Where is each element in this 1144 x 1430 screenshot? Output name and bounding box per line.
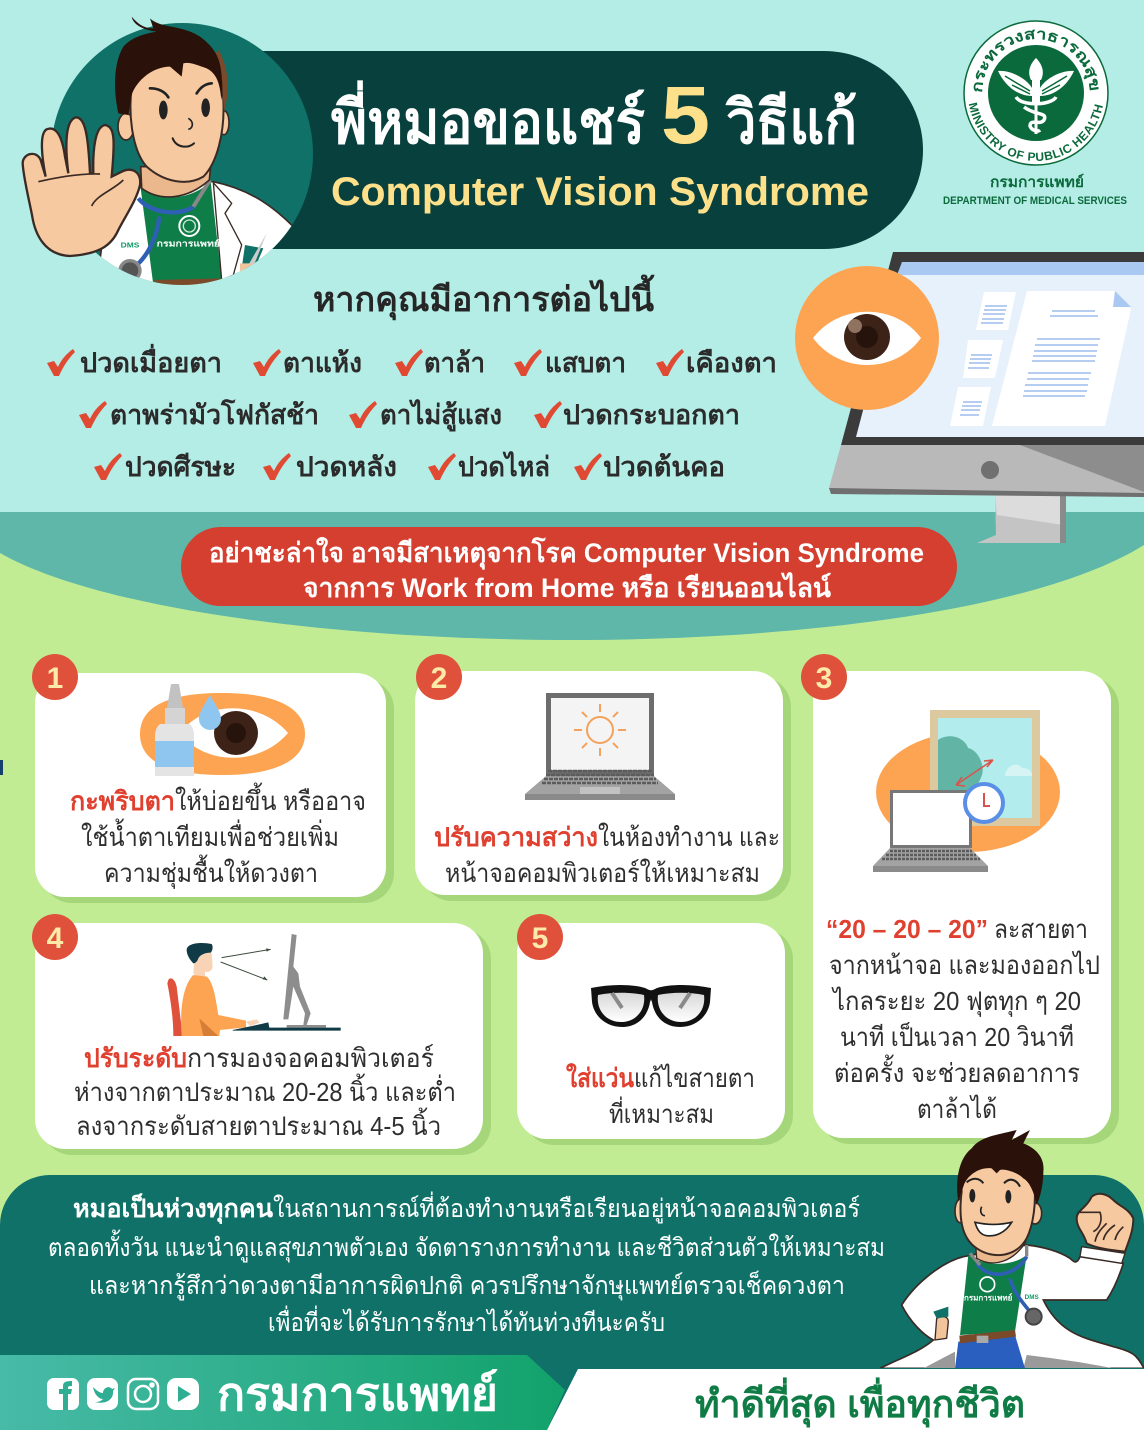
character: doctor flexing: กรมการแพทย์ [964, 1293, 1013, 1303]
logo ring text bottom: MINISTRY OF PUBLIC HEALTH [968, 102, 1103, 161]
warning pill: อย่าชะล่าใจ อาจมีสาเหตุจากโรค Computer Vision Syndrome [209, 536, 924, 570]
illustration: monitor [829, 252, 1144, 543]
symptoms checklist: ปวดไหล่ [458, 451, 550, 482]
icon: instagram [128, 1379, 158, 1409]
symptoms checklist: เคืองตา [686, 348, 777, 378]
card 5: glasses: ที่เหมาะสม [609, 1096, 714, 1129]
symptoms checklist: ตาล้า [424, 348, 485, 378]
teal curved band [0, 512, 1144, 640]
card 3: 20-20-20: ไกลระยะ 20 ฟุตทุก ๆ 20 [831, 986, 1081, 1017]
logo ring text top: กระทรวงสาธารณสุข [974, 30, 1099, 92]
footer slogan panel: ทำดีที่สุด เพื่อทุกชีวิต [695, 1377, 1025, 1428]
footer slogan panel [547, 1369, 1144, 1430]
badge 2: 2 [431, 662, 447, 695]
card 3: 20-20-20: นาที เป็นเวลา 20 วินาที [840, 1021, 1074, 1052]
symptoms checklist: ตาไม่สู้แสง [380, 399, 502, 432]
card 4: viewing distance: ลงจากระดับสายตาประมาณ 4-5 นิ้ว [76, 1107, 441, 1141]
message text: หมอเป็นห่วงทุกคน [73, 1193, 273, 1225]
badge 4: 4 [47, 922, 64, 955]
badge 3 [801, 654, 847, 700]
badge 1: 1 [47, 662, 63, 695]
card 5: glasses: แก้ไขสายตา [634, 1063, 755, 1093]
character: doctor flexing [880, 1130, 1144, 1368]
card 2: brightness: ในห้องทำงาน และ [598, 822, 780, 852]
card 1: blink: ใช้น้ำตาเทียมเพื่อช่วยเพิ่ม [81, 818, 339, 852]
badge 5: 5 [532, 922, 548, 955]
symptoms checklist: ปวดเมื่อยตา [80, 343, 222, 378]
header banner [260, 51, 923, 249]
icon: eye in orange circle [795, 266, 939, 410]
card 2: brightness: หน้าจอคอมพิวเตอร์ให้เหมาะสม [445, 858, 760, 888]
icon: laptop with sun [525, 693, 675, 800]
message text: ในสถานการณ์ที่ต้องทำงานหรือเรียนอยู่หน้าจอคอมพิวเตอร์ [273, 1191, 860, 1224]
card 4: viewing distance [35, 923, 491, 1155]
warning pill [181, 527, 957, 606]
card 4: viewing distance: การมองจอคอมพิวเตอร์ [187, 1043, 434, 1073]
icon: glasses [591, 985, 711, 1027]
message text [48, 1191, 885, 1337]
card 1: blink: กะพริบตา [70, 786, 175, 816]
title line: พี่หมอขอแชร์ [331, 80, 645, 156]
card 3: 20-20-20: ละสายตา [994, 914, 1088, 944]
icon: window laptop clock [873, 710, 1060, 872]
badge 4 [32, 914, 78, 960]
message text: เพื่อที่จะได้รับการรักษาได้ทันท่วงทีนะครับ [268, 1305, 665, 1337]
symptoms checklist: ปวดหลัง [296, 452, 397, 482]
symptoms checklist: ปวดศีรษะ [125, 452, 236, 482]
logo caduceus [998, 58, 1074, 134]
message text: และหากรู้สึกว่าดวงตามีอาการผิดปกติ ควรปรึกษาจักษุแพทย์ตรวจเช็คดวงตา [89, 1270, 845, 1301]
card 3: 20-20-20: “20 – 20 – 20” [826, 914, 988, 944]
symptoms checklist: ตาแห้ง [283, 348, 362, 378]
title line [331, 70, 857, 161]
character: doctor raising hand: กรมการแพทย์ [157, 239, 220, 249]
edge fragment [0, 760, 3, 775]
badge 5 [517, 914, 563, 960]
department name english: DEPARTMENT OF MEDICAL SERVICES [943, 195, 1127, 207]
title line: 5 [661, 70, 710, 161]
card 1: blink [35, 673, 394, 903]
warning pill: จากการ Work from Home หรือ เรียนออนไลน์ [303, 572, 832, 603]
icon: person at monitor [167, 934, 341, 1036]
badge 2 [416, 654, 462, 700]
symptoms heading: หากคุณมีอาการต่อไปนี้ [313, 274, 655, 321]
bottom message panel [0, 1175, 1144, 1430]
footer ribbon [0, 1355, 565, 1430]
card 3: 20-20-20: ต่อครั้ง จะช่วยลดอาการ [834, 1054, 1080, 1088]
dark title pill [260, 51, 923, 249]
icon: eye drops [140, 684, 305, 776]
logo: ministry of public health [963, 20, 1109, 166]
card 1: blink: ให้บ่อยขึ้น หรืออาจ [175, 782, 366, 816]
character: doctor flexing: DMS [1025, 1295, 1039, 1301]
card 1: blink: ความชุ่มชื้นให้ดวงตา [104, 854, 318, 889]
card 4: viewing distance: ปรับระดับ [84, 1043, 187, 1073]
card 5: glasses [517, 923, 793, 1145]
department name thai: กรมการแพทย์ [990, 173, 1084, 191]
symptoms checklist: ตาพร่ามัวโฟกัสช้า [110, 398, 319, 430]
badge 1 [32, 654, 78, 700]
subtitle: Computer Vision Syndrome [331, 170, 869, 214]
card 3: 20-20-20: ตาล้าได้ [917, 1094, 997, 1124]
symptoms checklist: ปวดต้นคอ [603, 452, 725, 482]
symptoms checklist: แสบตา [545, 348, 626, 378]
title line: วิธีแก้ [725, 89, 857, 156]
card 5: glasses: ใส่แว่น [566, 1063, 634, 1093]
icon: facebook [47, 1378, 79, 1410]
icon: youtube [167, 1378, 199, 1410]
badge 3: 3 [816, 662, 832, 695]
icon: twitter [87, 1378, 118, 1410]
symptoms checklist [47, 343, 777, 482]
symptoms checklist: ปวดกระบอกตา [563, 400, 740, 430]
background: lower green area [0, 512, 1144, 1430]
card 2: brightness [415, 671, 791, 901]
card 3: 20-20-20 [813, 671, 1119, 1144]
card 2: brightness: ปรับความสว่าง [434, 822, 598, 852]
footer brand name: กรมการแพทย์ [217, 1368, 498, 1420]
character: doctor raising hand: DMS [121, 240, 139, 249]
character: doctor raising hand [23, 17, 313, 290]
card 4: viewing distance: ห่างจากตาประมาณ 20-28 นิ้ว และต่ำ [74, 1073, 456, 1107]
card 3: 20-20-20: จากหน้าจอ และมองออกไป [829, 950, 1100, 980]
message text: ตลอดทั้งวัน แนะนำดูแลสุขภาพตัวเอง จัดตารางการทำงาน และชีวิตส่วนตัวให้เหมาะสม [48, 1229, 885, 1263]
